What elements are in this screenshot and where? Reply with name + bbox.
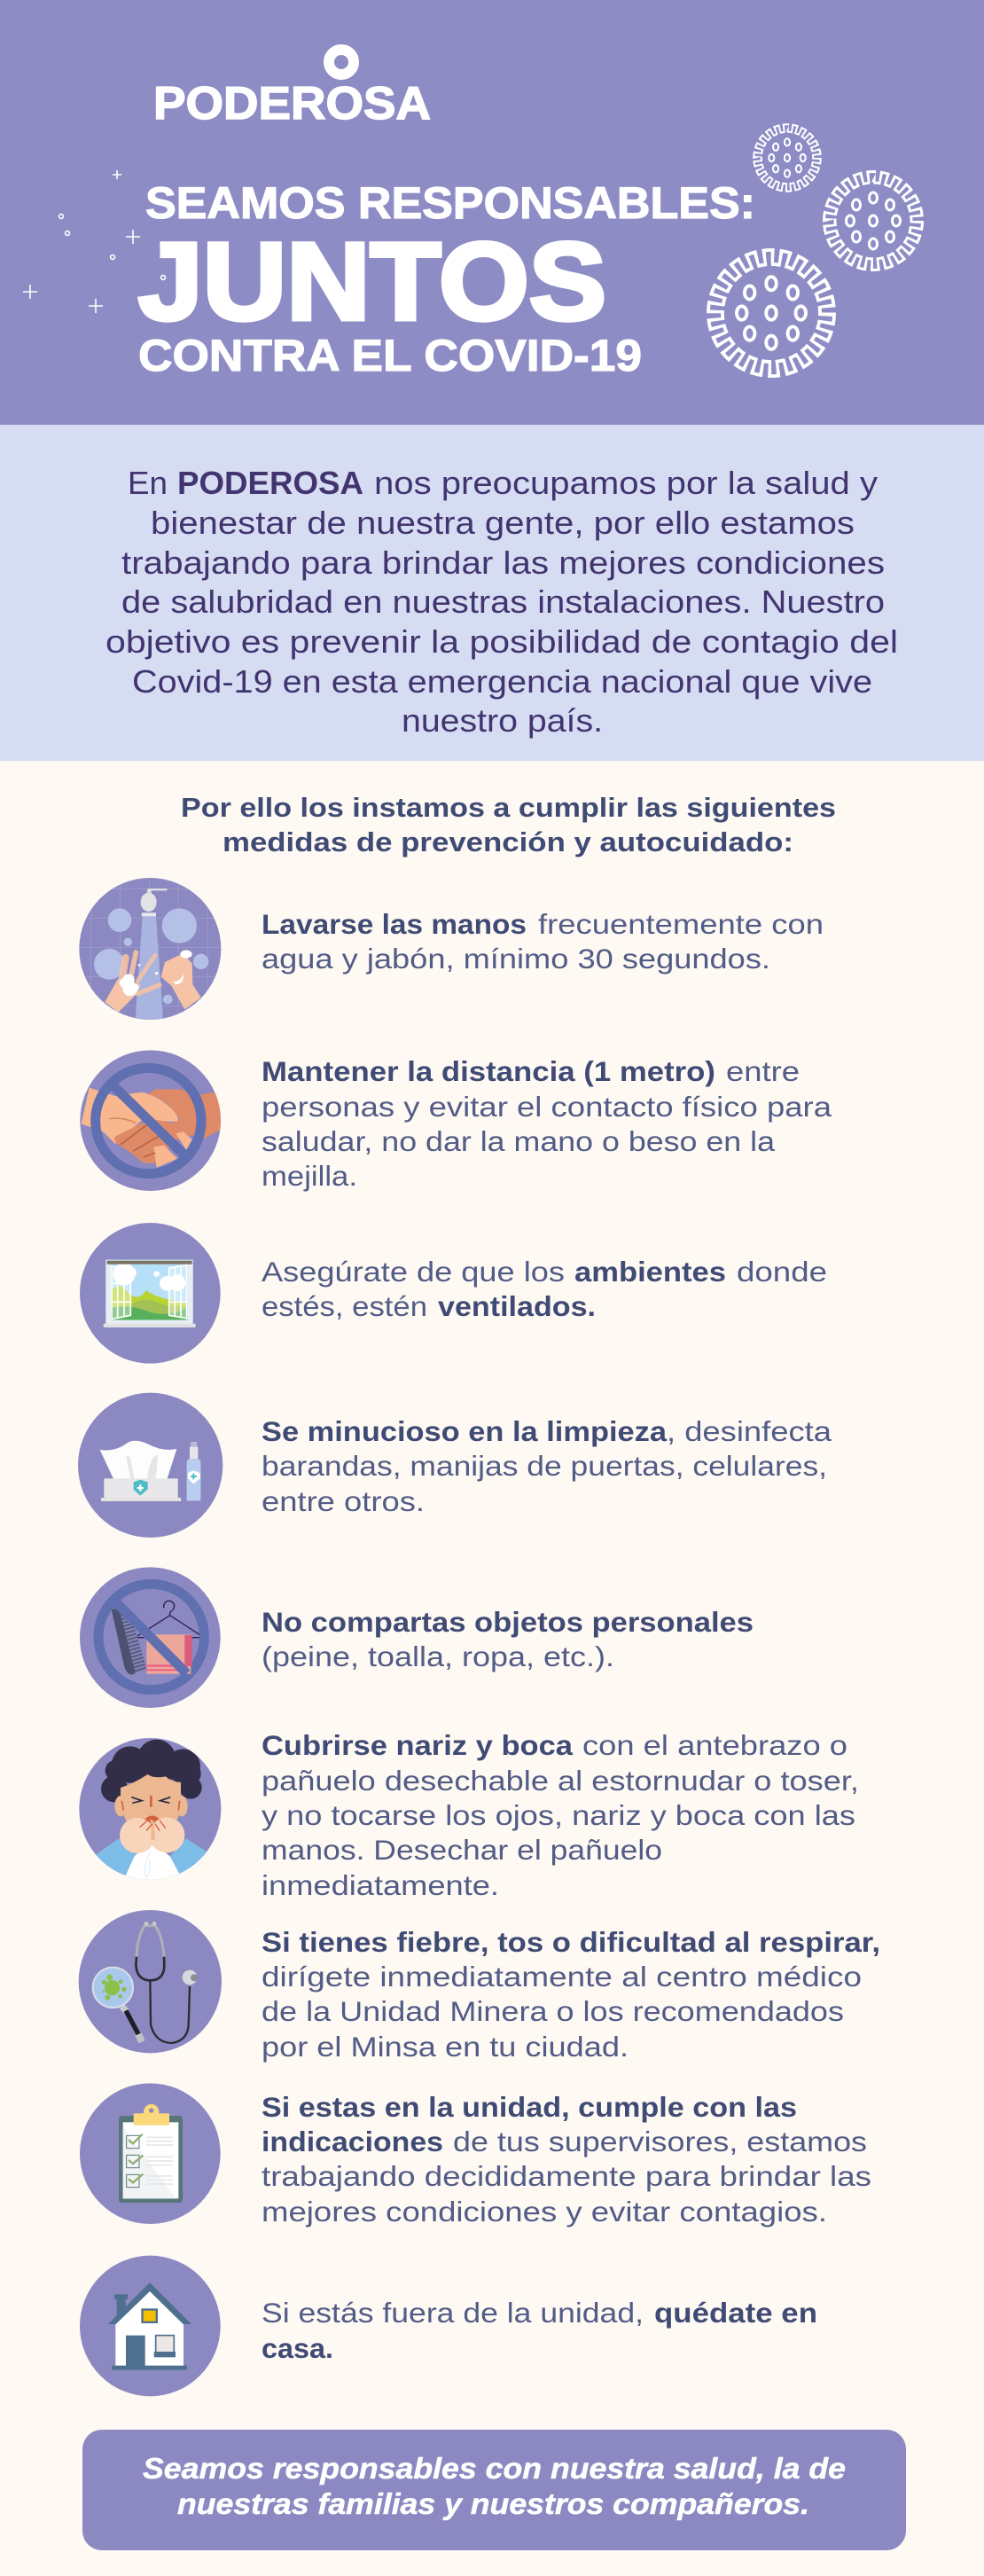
item text: mantener la distancia: personas y evitar el contacto físico para bbox=[262, 1091, 832, 1123]
heading: medidas: medidas de prevención y autocuidado: bbox=[223, 826, 793, 857]
icon: sparkles bbox=[23, 170, 165, 313]
item text: limpieza: , desinfecta bbox=[667, 1415, 832, 1447]
item text: ambientes ventilados: ambientes bbox=[574, 1256, 726, 1288]
item text: lavarse las manos: frecuentemente con bbox=[538, 908, 824, 940]
logo: PODEROSA: PODEROSA bbox=[153, 78, 431, 129]
icon: house bbox=[80, 2256, 221, 2396]
text: intro paragraph: objetivo es prevenir la posibilidad de contagio del bbox=[105, 623, 898, 660]
item text: en la unidad: Si estas en la unidad, cumple con las bbox=[262, 2091, 797, 2123]
item text: ambientes ventilados bbox=[262, 1256, 827, 1322]
item text: no compartas bbox=[262, 1606, 754, 1672]
icon: large virus bbox=[714, 255, 829, 371]
item text: en la unidad: trabajando decididamente para brindar las bbox=[262, 2160, 871, 2192]
text: intro paragraph: PODEROSA bbox=[177, 465, 363, 501]
item text: no compartas: No compartas objetos personales bbox=[262, 1606, 754, 1638]
item text: ambientes ventilados: ventilados. bbox=[438, 1290, 596, 1322]
item text: mantener la distancia: mejilla. bbox=[262, 1160, 357, 1192]
item text: ambientes ventilados: donde bbox=[737, 1256, 827, 1288]
item text: fiebre tos bbox=[262, 1926, 880, 2063]
callout: closing message bbox=[82, 2430, 906, 2550]
icon: sneezing person bbox=[79, 1738, 221, 1886]
item text: quedate en casa: quédate en bbox=[654, 2297, 817, 2329]
icon: stethoscope and magnifier bbox=[79, 1910, 222, 2053]
item text: limpieza: barandas, manijas de puertas, celulares, bbox=[262, 1450, 827, 1482]
callout: closing message: Seamos responsables con nuestra salud, la de bbox=[143, 2452, 846, 2485]
icon: tissue and spray bbox=[78, 1393, 223, 1538]
icon: no personal objects bbox=[80, 1567, 221, 1708]
text: intro paragraph: de salubridad en nuestras instalaciones. Nuestro bbox=[121, 583, 885, 620]
text: intro paragraph bbox=[105, 465, 898, 739]
text: intro paragraph: En bbox=[128, 465, 168, 501]
item text: en la unidad: de tus supervisores, estamos bbox=[453, 2126, 867, 2157]
item text: limpieza: entre otros. bbox=[262, 1485, 425, 1517]
item text: en la unidad bbox=[262, 2091, 871, 2228]
item text: ambientes ventilados: estés, estén bbox=[262, 1290, 427, 1322]
logo: PODEROSA bbox=[153, 50, 431, 129]
item text: mantener la distancia bbox=[262, 1055, 832, 1192]
item text: lavarse las manos bbox=[262, 908, 824, 975]
item text: cubrirse nariz y boca: manos. Desechar el pañuelo bbox=[262, 1834, 662, 1866]
item text: cubrirse nariz y boca: Cubrirse nariz y boca bbox=[262, 1729, 574, 1761]
item text: en la unidad: mejores condiciones y evitar contagios. bbox=[262, 2196, 827, 2228]
item text: cubrirse nariz y boca: con el antebrazo o bbox=[582, 1729, 847, 1761]
heading: juntos: JUNTOS bbox=[138, 221, 606, 343]
text: intro paragraph: Covid-19 en esta emergencia nacional que vive bbox=[132, 663, 872, 700]
item text: fiebre tos: por el Minsa en tu ciudad. bbox=[262, 2031, 629, 2063]
text: intro paragraph: bienestar de nuestra gente, por ello estamos bbox=[151, 505, 855, 541]
item text: cubrirse nariz y boca: inmediatamente. bbox=[262, 1869, 499, 1901]
icon: hand washing bbox=[79, 878, 221, 1020]
item text: fiebre tos: Si tienes fiebre, tos o dificultad al respirar, bbox=[262, 1926, 880, 1958]
heading: medidas bbox=[181, 792, 836, 857]
item text: limpieza: Se minucioso en la limpieza bbox=[262, 1415, 668, 1447]
item text: ambientes ventilados: Asegúrate de que los bbox=[262, 1256, 565, 1288]
item text: quedate en casa bbox=[262, 2297, 817, 2364]
icon: open window bbox=[80, 1223, 221, 1364]
item text: en la unidad: indicaciones bbox=[262, 2126, 443, 2157]
text: intro paragraph: nos preocupamos por la salud y bbox=[374, 465, 878, 501]
icon: small virus bbox=[757, 128, 817, 188]
item text: quedate en casa: Si estás fuera de la unidad, bbox=[262, 2297, 644, 2329]
icon: no handshake bbox=[80, 1050, 222, 1191]
item text: cubrirse nariz y boca: y no tocarse los ojos, nariz y boca con las bbox=[262, 1799, 855, 1831]
item text: limpieza bbox=[262, 1415, 832, 1517]
item text: mantener la distancia: entre bbox=[726, 1055, 800, 1087]
item text: lavarse las manos: Lavarse las manos bbox=[262, 908, 527, 940]
item text: cubrirse nariz y boca: pañuelo desechable al estornudar o toser, bbox=[262, 1765, 859, 1797]
item text: no compartas: (peine, toalla, ropa, etc.). bbox=[262, 1640, 614, 1672]
item text: quedate en casa: casa. bbox=[262, 2332, 333, 2364]
item text: cubrirse nariz y boca bbox=[262, 1729, 859, 1901]
item text: fiebre tos: dirígete inmediatamente al centro médico bbox=[262, 1961, 862, 1993]
panel: header bbox=[0, 0, 984, 425]
text: intro paragraph: nuestro país. bbox=[402, 702, 603, 739]
item text: mantener la distancia: Mantener la distancia (1 metro) bbox=[262, 1055, 715, 1087]
item text: mantener la distancia: saludar, no dar la mano o beso en la bbox=[262, 1125, 776, 1157]
heading: medidas: Por ello los instamos a cumplir las siguientes bbox=[181, 792, 836, 823]
icon: clipboard bbox=[80, 2083, 221, 2224]
callout: closing message: nuestras familias y nuestros compañeros. bbox=[177, 2487, 809, 2520]
item text: fiebre tos: de la Unidad Minera o los recomendados bbox=[262, 1995, 844, 2027]
text: intro paragraph: trabajando para brindar las mejores condiciones bbox=[121, 544, 885, 581]
heading: contra el covid-19: CONTRA EL COVID-19 bbox=[138, 331, 642, 380]
icon: medium virus bbox=[828, 176, 918, 266]
panel: intro bbox=[0, 425, 984, 761]
item text: lavarse las manos: agua y jabón, mínimo 30 segundos. bbox=[262, 943, 770, 975]
heading: seamos responsables: SEAMOS RESPONSABLES: bbox=[145, 178, 755, 228]
